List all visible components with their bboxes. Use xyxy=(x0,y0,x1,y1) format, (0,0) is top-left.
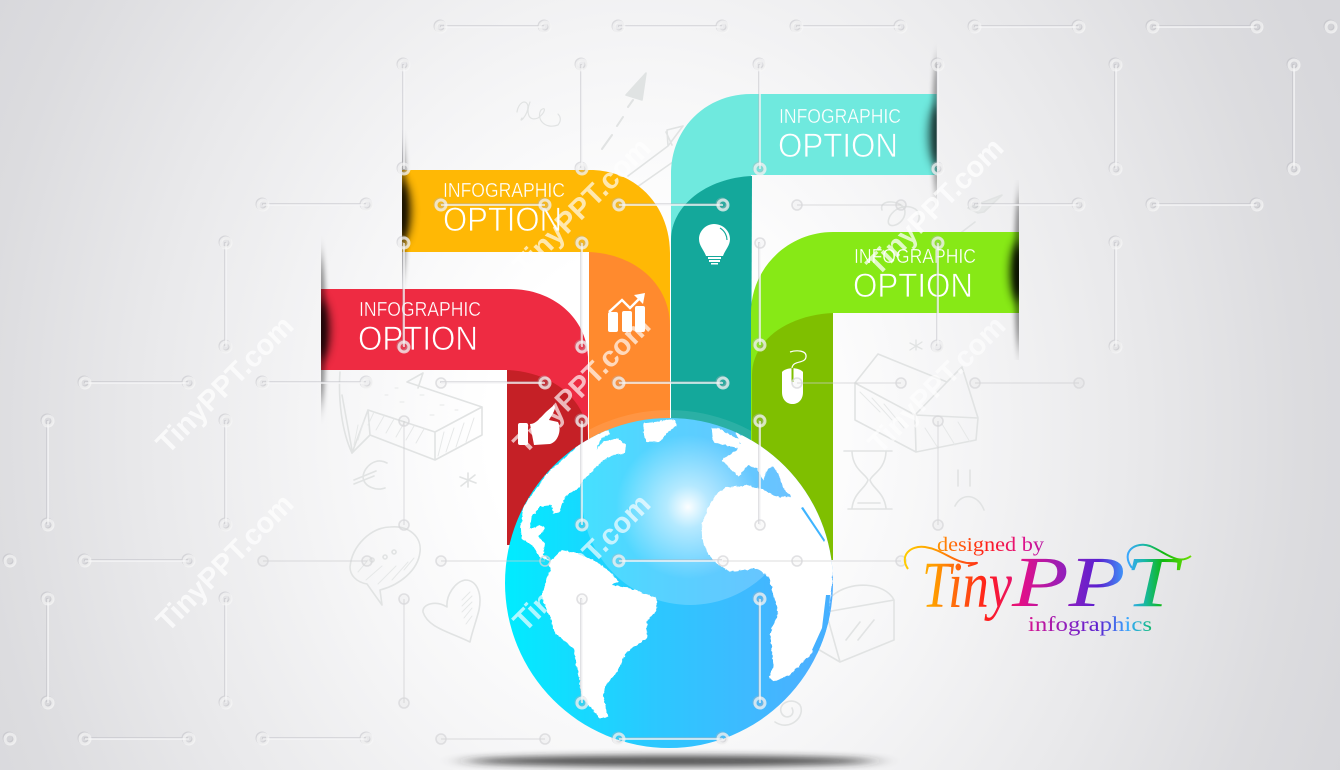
watermarks: TinyPPT.com xyxy=(507,132,657,282)
green label xyxy=(853,246,976,305)
red label xyxy=(358,299,481,358)
doodle: rising arrow xyxy=(602,73,646,149)
ribbon: red option xyxy=(321,289,588,545)
doodle: star xyxy=(460,473,476,487)
logo wordmark xyxy=(905,542,1191,622)
yellow label xyxy=(443,180,565,239)
doodle: heart xyxy=(423,580,480,642)
doodle: paper plane xyxy=(958,195,1002,235)
doodle: speech bubble xyxy=(350,527,420,605)
globe glass sheen xyxy=(582,418,791,605)
doodle: euro sign xyxy=(354,461,387,489)
logo caption top: designed by xyxy=(937,534,1044,556)
watermarks xyxy=(150,132,1012,638)
doodle: hourglass xyxy=(844,451,892,509)
globe xyxy=(505,410,833,748)
teal label xyxy=(778,106,901,165)
logo caption bottom: infographics xyxy=(1028,612,1152,636)
connector grid faint xyxy=(258,200,1084,744)
green label: INFOGRAPHIC xyxy=(854,246,976,268)
yellow band xyxy=(402,170,670,440)
globe sphere xyxy=(505,418,833,748)
doodle: cheese block xyxy=(816,585,894,662)
teal band xyxy=(671,94,937,440)
doodle: right brick xyxy=(855,340,978,452)
watermarks: TinyPPT.com xyxy=(507,488,657,638)
green inner fold xyxy=(752,313,833,560)
red band xyxy=(321,289,588,545)
ribbon: green option xyxy=(751,232,1019,560)
doodle: scribble xyxy=(517,102,560,126)
watermarks: TinyPPT.com xyxy=(507,310,657,460)
doodle: left brick xyxy=(340,372,482,460)
doodle: pencil xyxy=(600,126,690,210)
doodle: loop scribble xyxy=(882,202,919,226)
watermarks: TinyPPT.com xyxy=(150,310,300,460)
orange inner fold xyxy=(589,252,670,440)
red inner fold xyxy=(507,370,588,545)
globe halo xyxy=(589,410,751,440)
ribbon: yellow option xyxy=(402,170,670,440)
teal label: OPTION xyxy=(778,127,898,165)
lime band xyxy=(751,232,1019,560)
doodle: spiral xyxy=(775,701,801,725)
logo: designed by TinyPPT infographics xyxy=(905,534,1191,636)
watermarks: TinyPPT.com xyxy=(150,488,300,638)
dark teal inner fold xyxy=(671,176,752,440)
green label: OPTION xyxy=(853,267,973,305)
red label: OPTION xyxy=(358,320,478,358)
logo wordmark: PPT xyxy=(1011,542,1183,622)
doodle: frown face xyxy=(955,470,984,510)
yellow label: OPTION xyxy=(443,201,562,239)
watermarks: TinyPPT.com xyxy=(862,310,1012,460)
icon: growth chart xyxy=(608,293,645,332)
continents xyxy=(521,419,833,718)
logo wordmark: Tiny xyxy=(922,549,1013,622)
teal label: INFOGRAPHIC xyxy=(779,106,901,128)
icon: light bulb xyxy=(699,224,730,264)
red label: INFOGRAPHIC xyxy=(359,299,481,321)
ribbon end shadows xyxy=(312,60,1028,406)
icon: thumbs up xyxy=(518,405,560,445)
background doodles xyxy=(340,73,1002,725)
ribbon: teal option xyxy=(671,94,937,440)
watermarks: TinyPPT.com xyxy=(860,132,1010,282)
icon: computer mouse xyxy=(782,351,806,404)
ground shadow xyxy=(465,756,875,766)
yellow label: INFOGRAPHIC xyxy=(443,180,565,202)
